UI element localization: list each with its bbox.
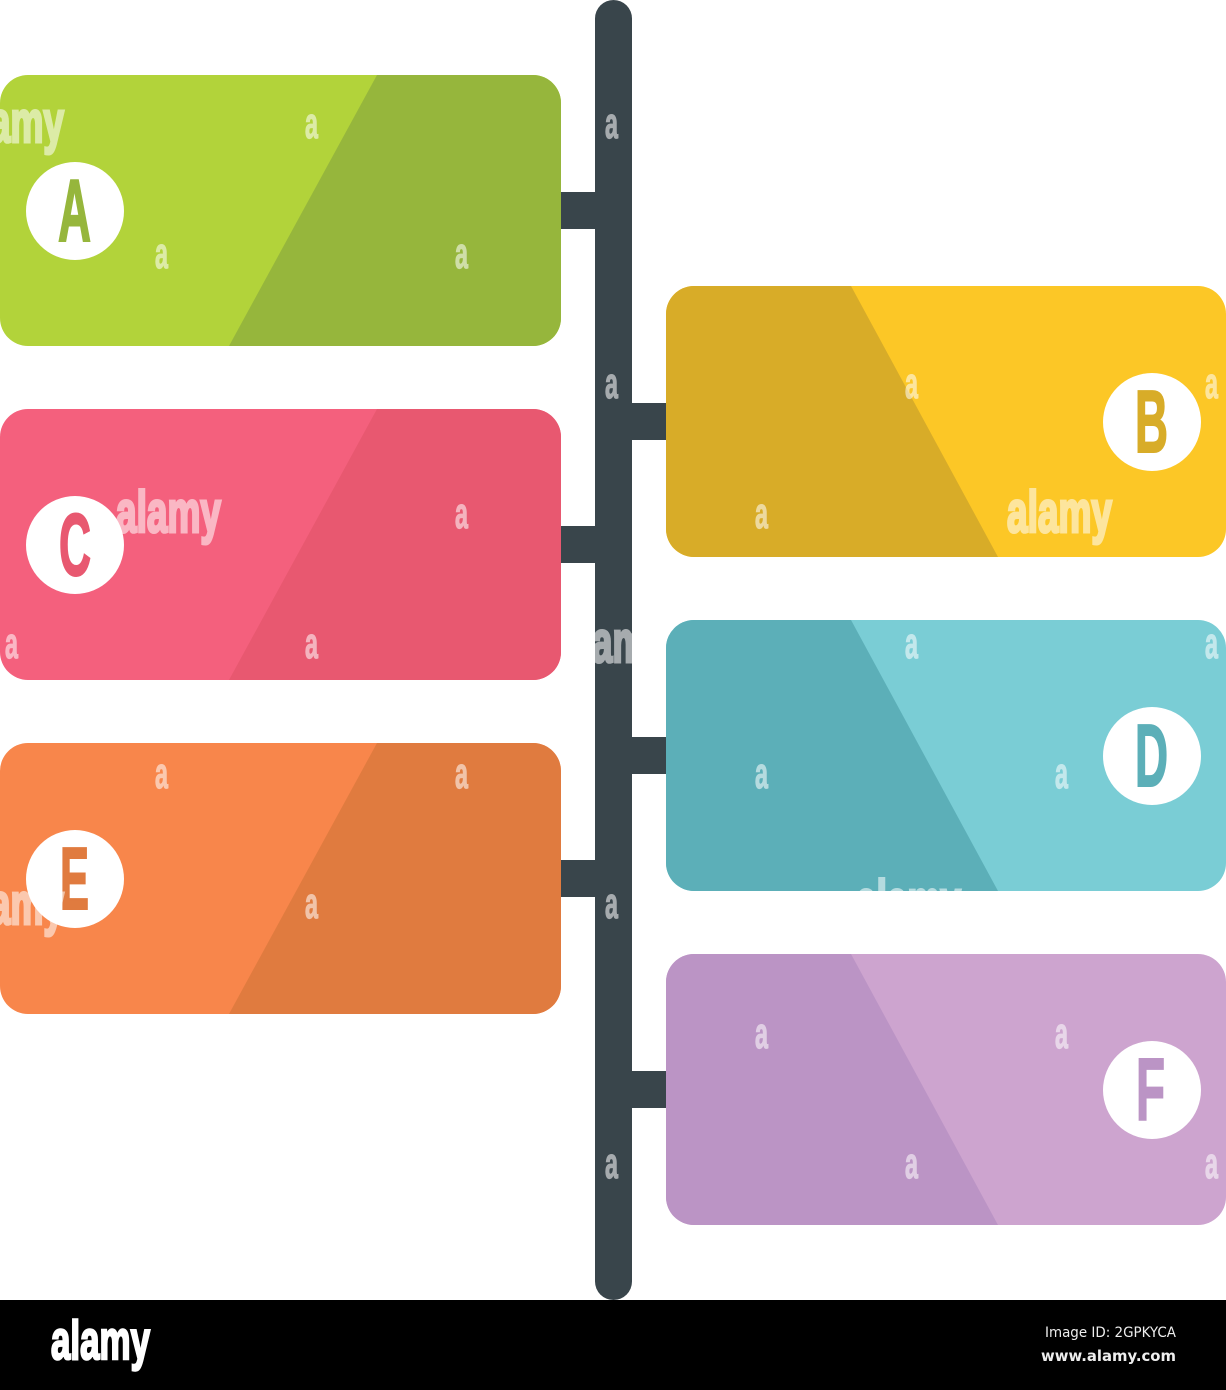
watermark overlay: a [455, 489, 468, 538]
panel: card C: C [59, 495, 91, 594]
panel: card A: A [58, 161, 91, 260]
panel: card F [666, 954, 1226, 1225]
panel: card B: B [1135, 372, 1168, 471]
footer band [0, 1300, 1226, 1390]
panel: card F: F [1136, 1040, 1165, 1139]
watermark overlay: alamy [561, 610, 666, 675]
watermark overlay: alamy [116, 480, 221, 545]
footer band: Image ID: 2GPKYCA [1045, 1325, 1176, 1341]
watermark overlay: a [605, 99, 618, 148]
watermark overlay: a [755, 489, 768, 538]
footer band: alamy [51, 1309, 150, 1371]
watermark overlay: a [605, 879, 618, 928]
watermark overlay: alamy [1007, 480, 1112, 545]
panel: card E: E [60, 829, 89, 928]
watermark overlay: a [1055, 1009, 1068, 1058]
watermark overlay: a [305, 99, 318, 148]
watermark overlay: a [605, 1139, 618, 1188]
watermark overlay: a [455, 229, 468, 278]
watermark overlay: a [905, 1139, 918, 1188]
panel: card C [0, 409, 561, 680]
watermark overlay: a [755, 1009, 768, 1058]
watermark overlay: a [605, 359, 618, 408]
watermark overlay [0, 90, 1218, 1188]
panel: card D [666, 620, 1226, 891]
panel: card E [0, 743, 561, 1014]
watermark overlay: a [305, 879, 318, 928]
watermark overlay: a [1055, 749, 1068, 798]
footer band: www.alamy.com [1041, 1347, 1176, 1365]
watermark overlay: a [905, 619, 918, 668]
watermark overlay: a [155, 229, 168, 278]
panel: card A [0, 75, 561, 346]
timeline: central vertical bar with connectors [559, 0, 668, 1300]
watermark overlay: alamy [856, 869, 961, 934]
watermark overlay: a [305, 619, 318, 668]
panel: card B [666, 286, 1226, 557]
panel: card D: D [1135, 706, 1168, 805]
watermark overlay: a [905, 359, 918, 408]
watermark overlay: a [455, 749, 468, 798]
watermark overlay: a [155, 749, 168, 798]
watermark overlay: a [755, 749, 768, 798]
watermark overlay: a [5, 619, 18, 668]
